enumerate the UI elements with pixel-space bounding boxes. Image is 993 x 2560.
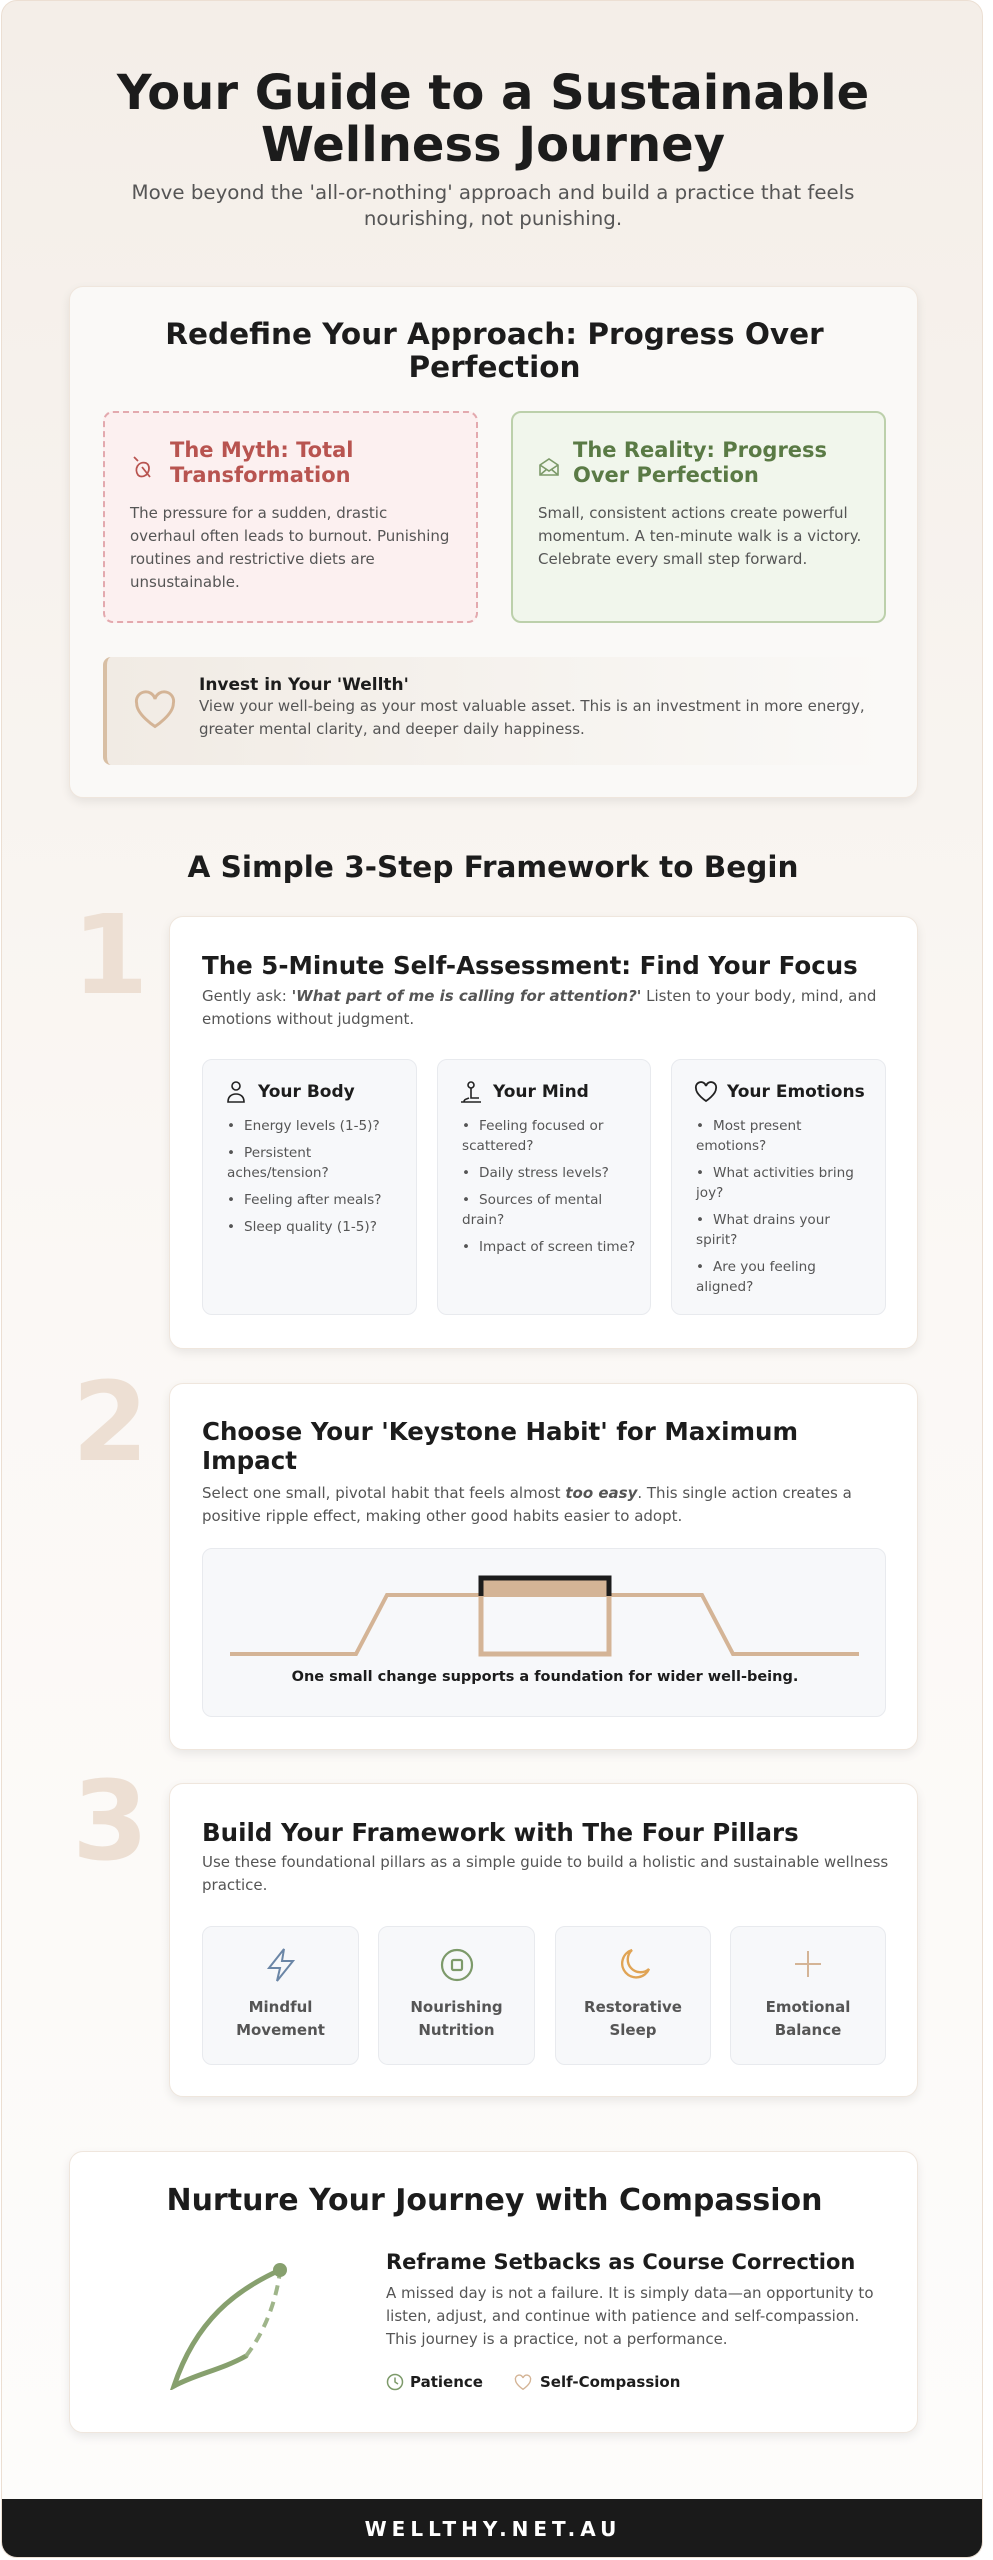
icon: plus xyxy=(795,1951,821,1977)
emotions heading: Your Emotions xyxy=(727,1082,865,1102)
emotions list: Are you feeling aligned? xyxy=(696,1259,816,1295)
title: Your Guide to a Sustainable xyxy=(117,65,869,121)
body list: Feeling after meals? xyxy=(244,1192,381,1208)
label xyxy=(410,1998,503,2039)
myth box xyxy=(103,411,478,623)
label: Emotional xyxy=(766,1998,850,2016)
icon: lightning xyxy=(267,1948,295,1982)
label xyxy=(766,1998,850,2039)
panel: compassion xyxy=(69,2151,918,2433)
step 2 text: Select one small, pivotal habit that feels almost too easy. This single action creates a positive ripple effect, making other good habits easier to adopt. xyxy=(202,1484,852,1525)
pillar: nutrition xyxy=(378,1926,535,2065)
step 2 title xyxy=(202,1417,798,1475)
label xyxy=(236,1998,325,2039)
reality title xyxy=(573,438,827,487)
mind list xyxy=(462,1118,635,1255)
label: Nourishing xyxy=(410,1998,503,2016)
tag: self-compassion: Self-Compassion xyxy=(540,2373,680,2391)
step 2 title: Impact xyxy=(202,1446,297,1475)
body list: Sleep quality (1-5)? xyxy=(244,1219,377,1235)
myth text: The pressure for a sudden, drastic overhaul often leads to burnout. Punishing routines and restrictive diets are unsustainable. xyxy=(130,504,449,591)
title xyxy=(116,65,869,173)
reframe heading: Reframe Setbacks as Course Correction xyxy=(386,2250,855,2274)
wellth callout xyxy=(103,657,886,765)
pillar: emotional xyxy=(730,1926,886,2065)
step 2 card xyxy=(169,1383,918,1750)
label: Restorative xyxy=(584,1998,682,2016)
label: Mindful xyxy=(249,1998,312,2016)
step 2 title: Choose Your 'Keystone Habit' for Maximum xyxy=(202,1417,798,1446)
icon: heart xyxy=(134,690,176,728)
icon: mind xyxy=(461,1081,481,1103)
label xyxy=(584,1998,682,2039)
pillar: sleep xyxy=(555,1926,711,2065)
subtitle xyxy=(132,181,854,230)
reframe text: A missed day is not a failure. It is simply data—an opportunity to listen, adjust, and continue with patience and self-compassion. This journey is a practice, not a performance. xyxy=(386,2284,874,2348)
label: Nutrition xyxy=(418,2021,495,2039)
tag: patience: Patience xyxy=(410,2373,483,2391)
icon: circle square xyxy=(440,1948,474,1982)
step number 3: 3 xyxy=(72,1757,149,1885)
myth title xyxy=(170,438,353,487)
label: Sleep xyxy=(609,2021,657,2039)
step 3 title: Build Your Framework with The Four Pillars xyxy=(202,1818,799,1847)
icon: envelope xyxy=(539,458,559,476)
panel: redefine approach xyxy=(69,286,918,798)
label: Balance xyxy=(775,2021,841,2039)
icon: leaf path xyxy=(170,2263,287,2390)
compassion title: Nurture Your Journey with Compassion xyxy=(166,2183,823,2218)
body heading: Your Body xyxy=(258,1082,355,1102)
emotions list: What drains your spirit? xyxy=(696,1212,830,1248)
emotions list: Most present emotions? xyxy=(696,1118,801,1154)
section heading: framework: A Simple 3-Step Framework to Begin xyxy=(187,850,798,884)
body list: Persistent aches/tension? xyxy=(227,1145,329,1181)
footer text: WELLTHY.NET.AU xyxy=(365,2517,621,2541)
icon: person xyxy=(227,1081,245,1103)
diagram: keystone xyxy=(202,1548,886,1717)
pillar: movement xyxy=(202,1926,359,2065)
title: Wellness Journey xyxy=(261,117,725,173)
panel heading: Perfection xyxy=(408,350,580,384)
icon: moon xyxy=(621,1948,650,1979)
step number 1: 1 xyxy=(72,891,149,1019)
subtitle: nourishing, not punishing. xyxy=(364,207,622,230)
icon: heart xyxy=(694,1081,718,1102)
myth title: The Myth: Total xyxy=(170,438,353,462)
reality box xyxy=(511,411,886,623)
mind list: Daily stress levels? xyxy=(479,1165,609,1181)
step 1 card xyxy=(169,916,918,1349)
callout title: Invest in Your 'Wellth' xyxy=(199,675,409,695)
mind heading: Your Mind xyxy=(493,1082,589,1102)
panel heading: Redefine Your Approach: Progress Over xyxy=(165,317,824,351)
mind list: Impact of screen time? xyxy=(479,1239,635,1255)
step 3 card xyxy=(169,1783,918,2097)
sub: body xyxy=(202,1059,417,1315)
subtitle: Move beyond the 'all-or-nothing' approach and build a practice that feels xyxy=(132,181,854,204)
mind list: Feeling focused or scattered? xyxy=(462,1118,603,1154)
step number 2: 2 xyxy=(72,1358,149,1486)
sub: mind xyxy=(437,1059,651,1315)
mind list: Sources of mental drain? xyxy=(462,1192,602,1228)
label: Movement xyxy=(236,2021,325,2039)
emotions list: What activities bring joy? xyxy=(696,1165,854,1201)
reality title: The Reality: Progress xyxy=(573,438,827,462)
step 3 text: Use these foundational pillars as a simple guide to build a holistic and sustainable wellness practice. xyxy=(202,1853,888,1894)
callout text: View your well-being as your most valuable asset. This is an investment in more energy, greater mental clarity, and deeper daily happiness. xyxy=(199,697,865,738)
emotions list xyxy=(696,1118,854,1295)
diagram caption: One small change supports a foundation for wider well-being. xyxy=(292,1669,798,1685)
footer xyxy=(2,2499,984,2560)
body list: Energy levels (1-5)? xyxy=(244,1118,380,1134)
icon: broken leaf xyxy=(133,456,151,478)
step 1 title: The 5-Minute Self-Assessment: Find Your Focus xyxy=(202,951,858,980)
body list xyxy=(227,1118,381,1235)
reality text: Small, consistent actions create powerful momentum. A ten-minute walk is a victory. Celebrate every small step forward. xyxy=(538,504,861,568)
reality title: Over Perfection xyxy=(573,463,759,487)
myth title: Transformation xyxy=(170,463,351,487)
step 1 text: Gently ask: 'What part of me is calling for attention?' Listen to your body, mind, and emotions without judgment. xyxy=(202,987,876,1028)
panel heading xyxy=(165,317,824,384)
sub: emotions xyxy=(671,1059,886,1315)
